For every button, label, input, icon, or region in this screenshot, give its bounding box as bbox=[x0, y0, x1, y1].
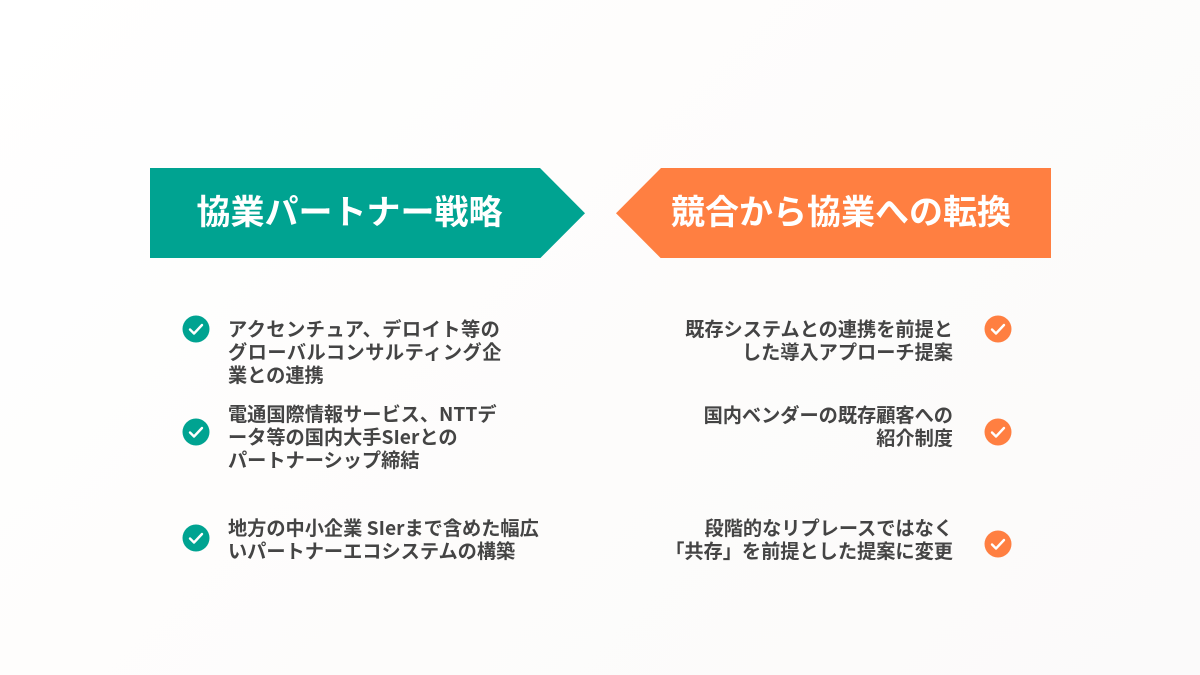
panel: left header arrow bbox=[150, 168, 585, 258]
icon: right check 3 bbox=[984, 530, 1012, 558]
text: left item 3: いパートナーエコシステムの構築 bbox=[228, 536, 515, 564]
text: left item 1: アクセンチュア、デロイト等の bbox=[228, 314, 500, 342]
icon: right check 1 bbox=[984, 316, 1012, 342]
text: right item 1: 既存システムとの連携を前提と bbox=[685, 314, 953, 342]
text: left item 2: ータ等の国内大手SIerとの bbox=[228, 422, 458, 450]
icon: left check 2 bbox=[182, 418, 210, 446]
heading: right: 競合から協業への転換 bbox=[671, 185, 1011, 234]
text: right item 3: 「共存」を前提とした提案に変更 bbox=[665, 536, 953, 564]
text: left item 2 bbox=[228, 399, 497, 473]
text: left item 2: パートナーシップ締結 bbox=[228, 445, 420, 473]
text: right item 2 bbox=[704, 400, 953, 450]
text: right item 2: 国内ベンダーの既存顧客への bbox=[704, 400, 953, 428]
text: right item 1 bbox=[685, 314, 953, 365]
heading: left: 協業パートナー戦略 bbox=[196, 185, 502, 234]
text: right item 3 bbox=[665, 513, 953, 564]
text: left item 3: 地方の中小企業 SIerまで含めた幅広 bbox=[228, 513, 539, 541]
text: right item 2: 紹介制度 bbox=[876, 422, 953, 450]
icon: right check 2 bbox=[984, 418, 1012, 446]
panel: right header arrow bbox=[616, 168, 1051, 258]
text: right item 3: 段階的なリプレースではなく bbox=[705, 513, 953, 541]
text: left item 2: 電通国際情報サービス、NTTデ bbox=[228, 399, 497, 427]
text: right item 1: した導入アプローチ提案 bbox=[742, 337, 953, 365]
icon: left check 1 bbox=[182, 316, 210, 342]
text: left item 1: 業との連携 bbox=[228, 360, 324, 388]
text: left item 3 bbox=[228, 513, 539, 564]
text: left item 1: グローバルコンサルティング企 bbox=[228, 337, 502, 365]
icon: left check 3 bbox=[182, 524, 210, 552]
text: left item 1 bbox=[228, 314, 502, 388]
